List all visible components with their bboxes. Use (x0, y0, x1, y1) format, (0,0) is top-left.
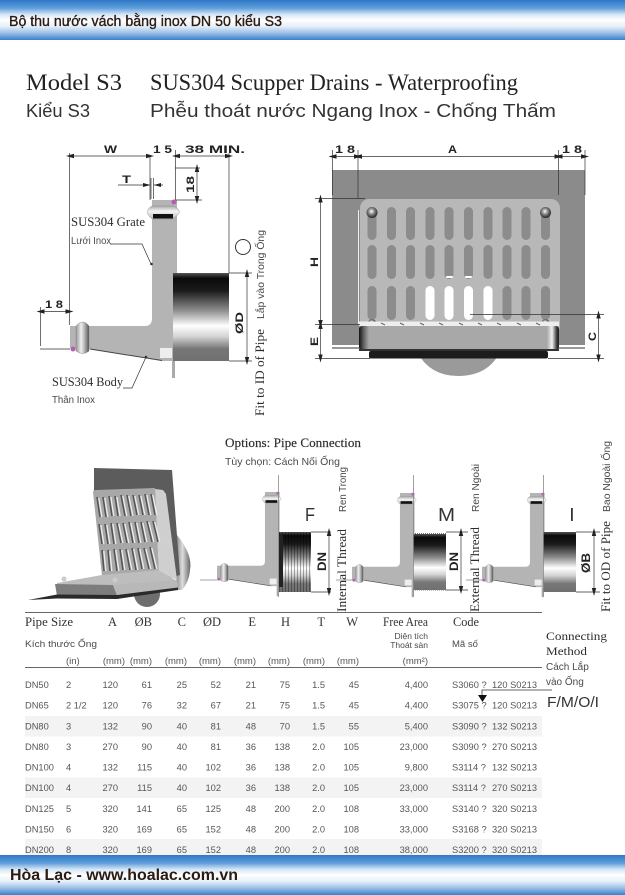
row DN200: 108 (343, 845, 359, 855)
front dimensions: E (309, 337, 321, 346)
front dimensions: H (309, 257, 321, 267)
F dimensions: DN (315, 552, 329, 571)
F dimensions (311, 532, 331, 592)
row DN100 A: 4 (66, 762, 71, 772)
row DN100 A: 115 (137, 762, 152, 772)
open white slots (426, 276, 492, 320)
row DN100 A: S3114 ? (452, 762, 486, 772)
arrow to code (478, 690, 552, 702)
row DN65: 67 (211, 700, 221, 710)
row DN150: 2.0 (312, 824, 325, 834)
row DN80 A: 81 (211, 722, 221, 732)
tray (57, 570, 177, 586)
row DN80 B: 90 (142, 742, 152, 752)
connecting method callout: vào Ống (546, 674, 584, 688)
label M: M (438, 505, 455, 525)
table header: Thoát sàn (390, 640, 428, 650)
table header: Diện tích (394, 631, 428, 641)
row DN150: 200 (274, 824, 290, 834)
row DN80 B: 40 (177, 742, 187, 752)
table header: C (178, 615, 186, 629)
side dimensions: W (104, 144, 118, 156)
I captions: Fit to OD of Pipe (599, 521, 613, 612)
row DN65: 1.5 (312, 700, 325, 710)
side section drawing (40, 144, 267, 416)
row DN65: 45 (349, 700, 359, 710)
grate lip (359, 322, 559, 326)
row DN50: S3060 ? (452, 680, 487, 690)
row DN150: 152 (205, 824, 221, 834)
row DN80 B: S3090 ? (452, 742, 487, 752)
row DN200: 169 (136, 845, 152, 855)
table header: (mm) (199, 656, 221, 667)
row DN50: 4,400 (405, 680, 428, 690)
table header: Mã số (452, 639, 479, 650)
table header: Free Area (383, 615, 428, 629)
row DN65: 76 (142, 700, 152, 710)
row DN125: 5 (66, 804, 71, 814)
row DN50: 52 (211, 680, 221, 690)
row DN80 A: 5,400 (405, 722, 428, 732)
table header: A (108, 615, 117, 629)
row DN80 A: 1.5 (312, 722, 325, 732)
row DN150: S3168 ? (452, 824, 487, 834)
row DN150: 320 S0213 (492, 824, 537, 834)
side dimensions: 1 5 (153, 144, 172, 156)
row DN80 B: 138 (274, 742, 290, 752)
drain body profile (70, 200, 180, 378)
grate label: Lưới Inox (71, 236, 111, 247)
row DN100 B: 105 (343, 783, 359, 793)
table header: Pipe Size (25, 615, 73, 629)
row DN80 B: 270 S0213 (492, 742, 537, 752)
row DN100 A: 132 (102, 762, 118, 772)
row DN100 A: DN100 (25, 762, 54, 772)
front dimensions: 1 8 (335, 144, 355, 156)
connecting method callout: Connecting (546, 629, 607, 643)
table header: T (317, 615, 325, 629)
row DN50 (25, 680, 537, 690)
row DN80 B: DN80 (25, 742, 49, 752)
M dimensions (446, 532, 468, 590)
option M external thread (336, 464, 482, 612)
row DN100 B: DN100 (25, 783, 54, 793)
perspective product view (28, 468, 190, 607)
row DN125: S3140 ? (452, 804, 487, 814)
label F: F (305, 505, 315, 525)
table header: E (248, 615, 256, 629)
row DN80 B: 3 (66, 742, 71, 752)
option F internal thread (200, 467, 349, 612)
row DN150: 65 (177, 824, 187, 834)
row DN100 A: 40 (177, 762, 187, 772)
row DN80 B: 36 (246, 742, 256, 752)
M dimensions: DN (447, 552, 461, 571)
row DN200: 200 (274, 845, 290, 855)
row DN200: 2.0 (312, 845, 325, 855)
header title: Bộ thu nước vách bằng inox DN 50 kiểu S3 (9, 13, 282, 30)
row DN50: 2 (66, 680, 71, 690)
row DN65: 120 (102, 700, 118, 710)
row DN100 B (25, 783, 537, 793)
option O marker: Lắp vào Trong Ống (253, 230, 267, 319)
row DN125: DN125 (25, 804, 54, 814)
row DN80 A: S3090 ? (452, 722, 487, 732)
row DN80 B: 23,000 (400, 742, 428, 752)
side dimensions: ØD (234, 312, 246, 334)
row DN200: 8 (66, 845, 71, 855)
row DN80 A: 132 (102, 722, 118, 732)
row DN200: 152 (205, 845, 221, 855)
grate plate (360, 199, 560, 335)
row DN200: 320 (102, 845, 118, 855)
connecting method callout: Method (546, 644, 587, 658)
row DN65: DN65 (25, 700, 49, 710)
F captions (335, 467, 349, 612)
label I (571, 508, 573, 521)
row DN150: 48 (246, 824, 256, 834)
front dimensions (309, 144, 604, 358)
M captions: Ren Ngoài (470, 464, 482, 512)
row DN80 A (25, 722, 537, 732)
row DN100 A: 138 (274, 762, 290, 772)
slanted slots (97, 494, 158, 571)
table header: Code (453, 615, 479, 629)
row DN50: 21 (246, 680, 256, 690)
row DN65: 2 1/2 (66, 700, 87, 710)
M captions: External Thread (468, 526, 482, 612)
grate slots (368, 207, 550, 320)
Vietnamese title (26, 100, 556, 121)
row DN65 (25, 700, 537, 710)
row DN125: 141 (136, 804, 152, 814)
connecting method callout: F/M/O/I (547, 694, 599, 711)
front dimensions: C (587, 332, 599, 341)
row DN125: 200 (274, 804, 290, 814)
screws (366, 207, 378, 218)
row DN65: 32 (177, 700, 187, 710)
row DN80 A: 3 (66, 722, 71, 732)
row DN100 A: 102 (205, 762, 221, 772)
front dimensions: 1 8 (562, 144, 582, 156)
row DN100 B: 102 (205, 783, 221, 793)
row DN150: 320 (102, 824, 118, 834)
row DN65: 4,400 (405, 700, 428, 710)
row DN50: 120 S0213 (492, 680, 537, 690)
I dimensions (576, 532, 600, 592)
row DN50: 1.5 (312, 680, 325, 690)
row DN50: 61 (142, 680, 152, 690)
table header: W (346, 615, 358, 629)
I captions: Bao Ngoài Ống (599, 441, 613, 512)
row DN65: 21 (246, 700, 256, 710)
row DN125: 2.0 (312, 804, 325, 814)
side dimensions: T (122, 174, 131, 186)
row DN65: 75 (280, 700, 290, 710)
round pipe behind (176, 535, 190, 590)
body label (52, 356, 147, 406)
row DN100 A: 36 (246, 762, 256, 772)
row DN65: 120 S0213 (492, 700, 537, 710)
row DN200: DN200 (25, 845, 54, 855)
table header: (mm) (130, 656, 152, 667)
row DN125: 108 (343, 804, 359, 814)
grate label: SUS304 Grate (71, 215, 145, 229)
row DN100 B: 2.0 (312, 783, 325, 793)
row DN80 A: 132 S0213 (492, 722, 537, 732)
row DN150: 6 (66, 824, 71, 834)
table header: (mm²) (403, 656, 428, 667)
I dimensions: ØB (579, 553, 593, 573)
collection tray (359, 326, 559, 350)
table header: (mm) (268, 656, 290, 667)
row DN125 (25, 804, 537, 814)
row DN80 B: 270 (102, 742, 118, 752)
table header (25, 615, 479, 667)
row DN200: 38,000 (400, 845, 428, 855)
row DN150: DN150 (25, 824, 54, 834)
row DN100 B: 4 (66, 783, 71, 793)
row DN200: S3200 ? (452, 845, 487, 855)
table header: H (281, 615, 290, 629)
row DN125: 65 (177, 804, 187, 814)
F captions: Internal Thread (335, 528, 349, 612)
grate side frame (155, 489, 177, 580)
row DN80 A: 70 (280, 722, 290, 732)
row DN80 B: 2.0 (312, 742, 325, 752)
row DN50: 45 (349, 680, 359, 690)
grate plate perspective (93, 488, 159, 576)
row DN50: 120 (102, 680, 118, 690)
row DN100 B: 138 (274, 783, 290, 793)
row DN100 A: 105 (343, 762, 359, 772)
body label: Thân Inox (52, 395, 95, 406)
option O marker: Fit to ID of Pipe (253, 329, 267, 416)
M captions (468, 464, 482, 612)
Vietnamese title: Phễu thoát nước Ngang Inox - Chống Thấm (150, 100, 556, 121)
row DN80 B: 81 (211, 742, 221, 752)
row DN125: 125 (205, 804, 221, 814)
row DN80 A: 40 (177, 722, 187, 732)
title block (26, 70, 556, 121)
bottom outlet circle (134, 581, 160, 607)
table header: (mm) (234, 656, 256, 667)
front dimensions: A (448, 144, 457, 156)
row DN65: S3075 ? (452, 700, 487, 710)
table header: (mm) (103, 656, 125, 667)
row DN125: 320 S0213 (492, 804, 537, 814)
row DN200: 48 (246, 845, 256, 855)
row DN80 B (25, 742, 537, 752)
footer text: Hòa Lạc - www.hoalac.com.vn (10, 867, 238, 884)
options heading (225, 436, 362, 468)
row DN50: 25 (177, 680, 187, 690)
table header: ØB (135, 615, 152, 629)
header bar (0, 0, 625, 40)
row DN100 B: 270 S0213 (492, 783, 537, 793)
table header: ØD (203, 615, 221, 629)
row DN100 A: 132 S0213 (492, 762, 537, 772)
side dimensions (40, 144, 252, 361)
table header: (in) (66, 656, 80, 667)
option O marker (236, 230, 267, 416)
row DN50: 75 (280, 680, 290, 690)
row DN80 A: 90 (142, 722, 152, 732)
table header: Kích thước Ống (25, 638, 97, 650)
row DN200 (25, 845, 537, 855)
side dimensions: 1 8 (45, 299, 63, 311)
row DN150: 33,000 (400, 824, 428, 834)
back plate (94, 468, 180, 580)
row DN125: 33,000 (400, 804, 428, 814)
side dimensions: 38 MIN. (185, 144, 245, 156)
table header: (mm) (303, 656, 325, 667)
row DN100 A: 2.0 (312, 762, 325, 772)
row DN100 B: 115 (137, 783, 152, 793)
row DN100 B: 40 (177, 783, 187, 793)
row DN150: 169 (136, 824, 152, 834)
row DN80 A: 48 (246, 722, 256, 732)
row DN200: 320 S0213 (492, 845, 537, 855)
Vietnamese title: Kiểu S3 (26, 101, 90, 121)
footer bar (0, 855, 625, 895)
row DN100 B: 270 (102, 783, 118, 793)
row DN125: 48 (246, 804, 256, 814)
row DN50: DN50 (25, 680, 49, 690)
connecting method callout: Cách Lắp (546, 660, 589, 673)
option I outer fit (466, 441, 613, 612)
row DN80 A: 55 (349, 722, 359, 732)
row DN80 B: 105 (343, 742, 359, 752)
pipe circle behind (417, 352, 500, 376)
options heading: Options: Pipe Connection (225, 436, 362, 450)
row DN200: 65 (177, 845, 187, 855)
row DN100 B: 36 (246, 783, 256, 793)
row DN80 A: DN80 (25, 722, 49, 732)
row DN150 (25, 824, 537, 834)
English title: Model S3 (26, 70, 122, 95)
specification table (25, 612, 542, 856)
row DN150: 108 (343, 824, 359, 834)
row DN100 A (25, 762, 537, 772)
F captions: Ren Trong (337, 467, 349, 512)
connecting method callout (478, 629, 607, 711)
side dimensions: 18 (185, 176, 197, 193)
table header: (mm) (337, 656, 359, 667)
I captions (599, 441, 613, 612)
wall plate (332, 170, 585, 345)
options subheading: Tùy chọn: Cách Nối Ống (225, 454, 340, 468)
row DN125: 320 (102, 804, 118, 814)
row DN100 B: S3114 ? (452, 783, 486, 793)
front view drawing (309, 144, 604, 376)
table header: (mm) (165, 656, 187, 667)
row DN100 A: 9,800 (405, 762, 428, 772)
grate label (71, 215, 153, 265)
drain pipe (173, 273, 229, 361)
row DN100 B: 23,000 (400, 783, 428, 793)
body label: SUS304 Body (52, 375, 124, 389)
English title: SUS304 Scupper Drains - Waterproofing (150, 70, 518, 95)
